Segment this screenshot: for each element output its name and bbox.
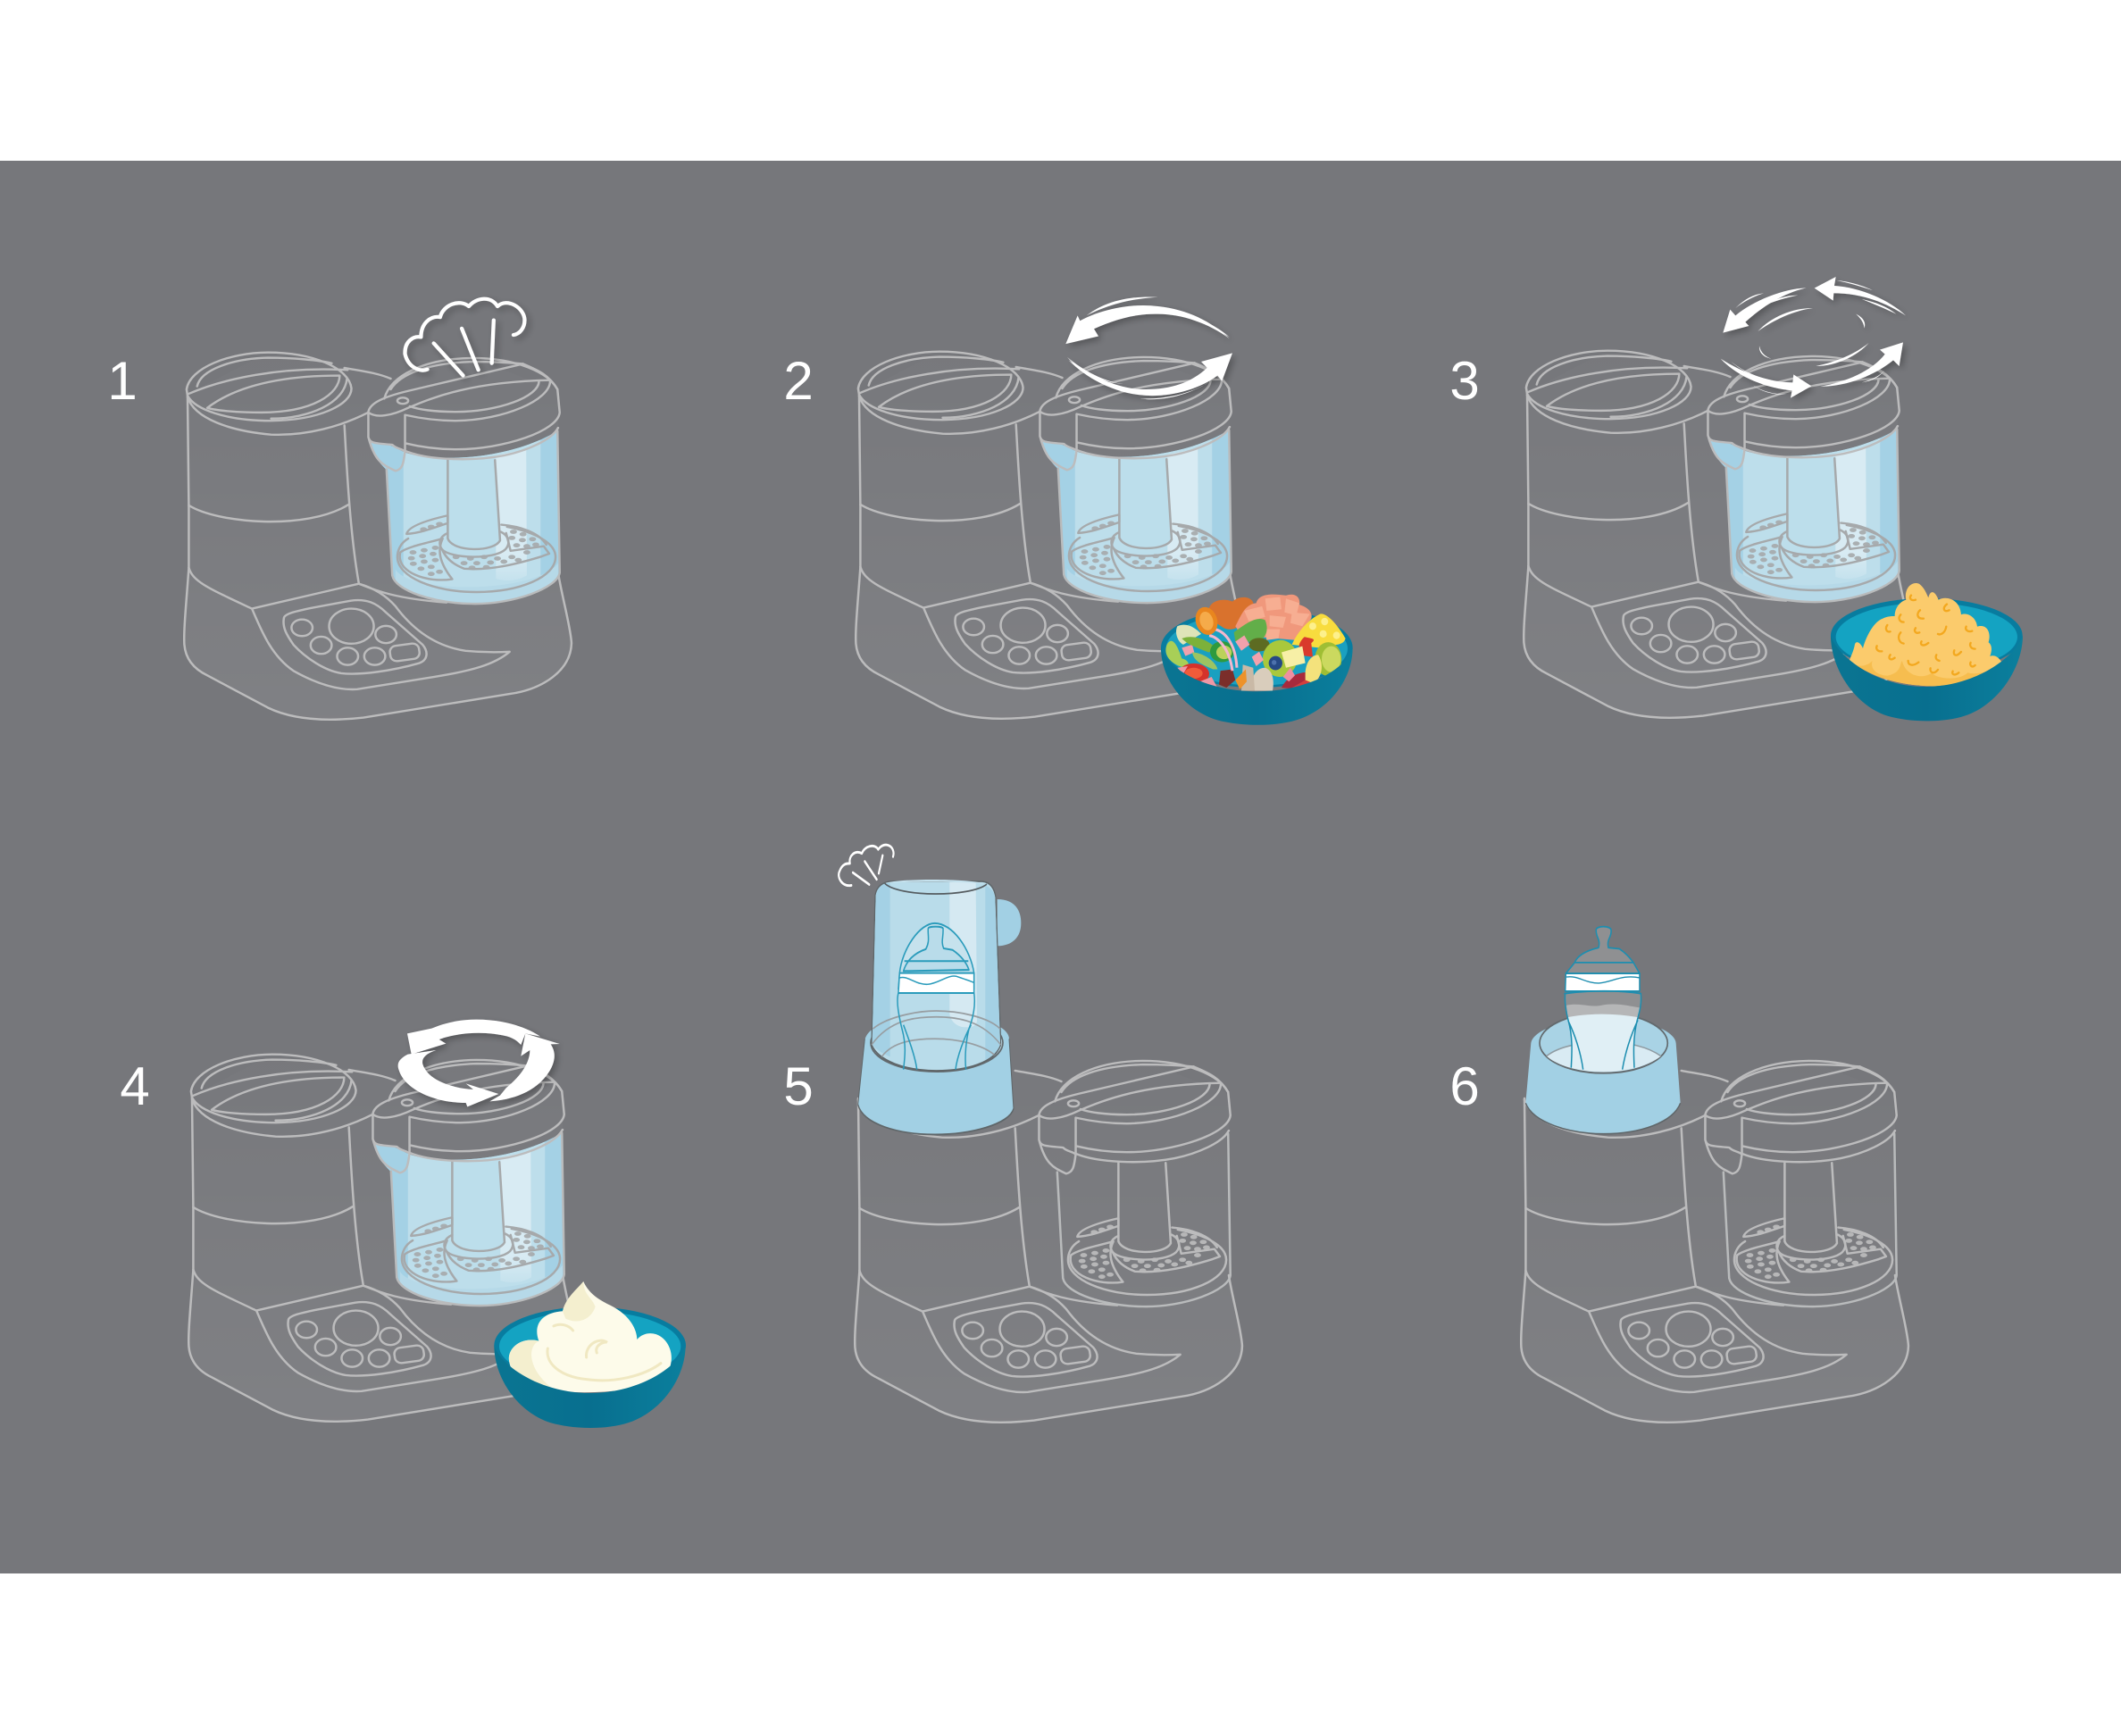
panel: step 3 [1449,277,2023,721]
warmer base ring [858,1013,1014,1134]
panel: step 6 [1449,927,1908,1423]
step number 3: 3 [1449,351,1480,411]
icon: small steam cloud [839,845,894,886]
warmer with baby bottle [1525,927,1681,1134]
salad food pile [1165,595,1346,691]
glass jug with handle [872,880,1021,1071]
machine outline, empty jug, no lid [1521,1056,1908,1423]
bowl front shell [494,1346,686,1428]
baby bottle inside jug [898,923,974,1070]
machine outline with filled blue jug [1524,351,1911,718]
arrows: fast four-way rotation [1721,277,1906,398]
bottle warmer vessel on machine [858,880,1021,1134]
panel: step 1 [107,299,572,720]
icon: steam cloud [405,299,524,376]
bowl of smooth puree [494,1281,686,1428]
panel: step 4 [120,1020,686,1428]
step number 6: 6 [1449,1056,1480,1116]
panel: step 5 [783,845,1242,1423]
baby bottle [1564,927,1641,1072]
bowl rim and interior [1161,608,1353,688]
arrows: slow two-way rotation [1065,296,1232,399]
step number 1: 1 [107,351,138,411]
white top band [0,0,2121,161]
white bottom band [0,1573,2121,1736]
panel: step 2 [783,296,1353,725]
bowl rim and interior [494,1306,686,1384]
step number 4: 4 [120,1056,150,1116]
machine outline with filled blue jug [188,1055,576,1422]
warmer base ring [1525,1013,1681,1134]
bowl front shell [1161,647,1353,725]
chopped yellow food pile [1850,583,2003,686]
step number 2: 2 [783,351,814,411]
puree swirl [509,1281,672,1392]
machine outline, empty jug, no lid [855,1056,1242,1423]
machine outline with filled blue jug [856,352,1243,719]
bowl rim and interior [1831,598,2023,672]
bowl of chopped food [1831,583,2023,721]
bowl front shell [1831,636,2023,721]
arrows: continuous ring rotation [398,1020,560,1106]
step number 5: 5 [783,1056,814,1116]
machine outline with filled blue jug [184,353,572,720]
bowl of chopped salad ingredients [1161,595,1353,725]
